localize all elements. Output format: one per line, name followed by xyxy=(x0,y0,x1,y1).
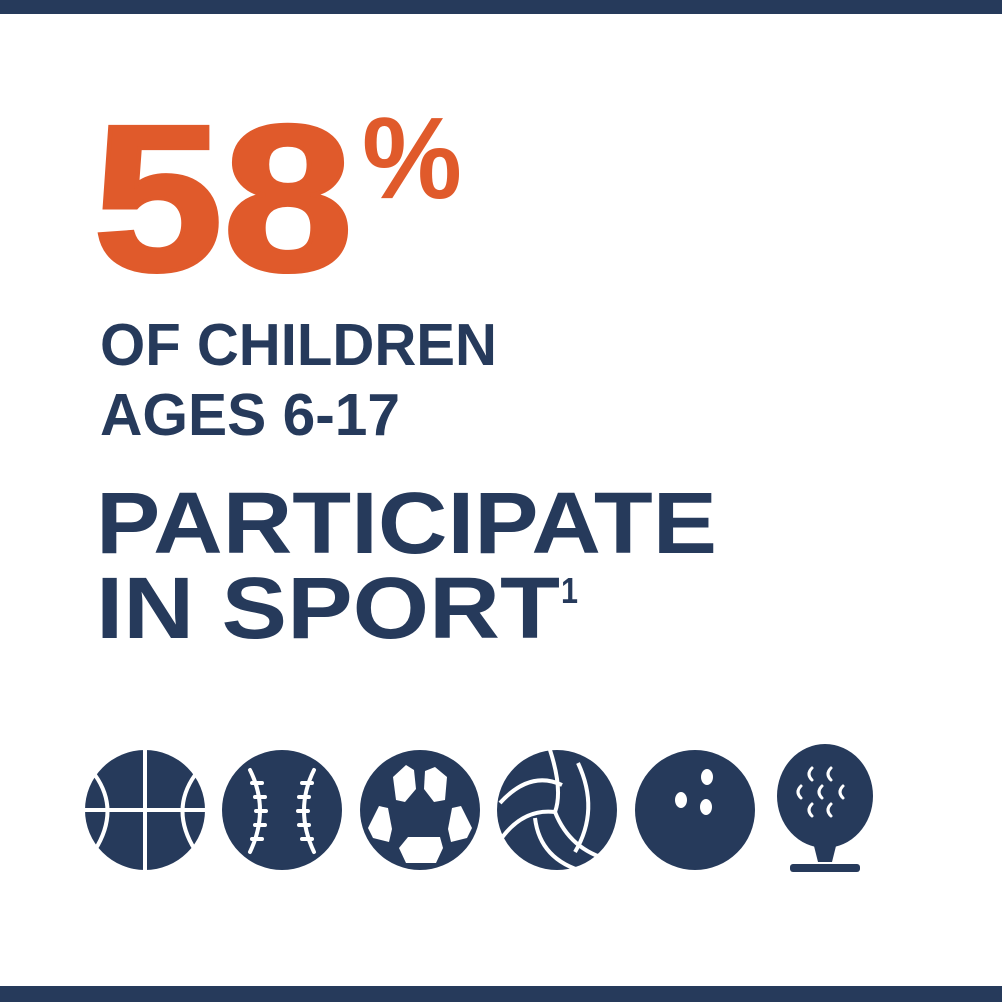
subtitle: of children ages 6-17 xyxy=(100,312,497,448)
icon: basketball xyxy=(85,750,205,870)
subtitle: of children ages 6-17: OF CHILDREN xyxy=(100,312,497,378)
heading: participate in sport: PARTICIPATE xyxy=(96,475,717,572)
heading: participate in sport: IN SPORT xyxy=(96,560,560,657)
icon: baseball xyxy=(222,750,342,870)
top border bar xyxy=(0,0,1002,14)
icon: soccer ball xyxy=(360,750,480,870)
icon: volleyball xyxy=(497,750,617,872)
icon: golf ball on tee xyxy=(777,744,873,872)
headline number 58%: % xyxy=(362,93,462,223)
subtitle: of children ages 6-17: AGES 6-17 xyxy=(100,382,400,448)
bottom border bar xyxy=(0,986,1002,1002)
headline number 58%: 58 xyxy=(93,83,353,315)
headline number 58% xyxy=(93,83,462,315)
icon: bowling ball xyxy=(635,750,755,870)
heading: participate in sport: 1 xyxy=(561,570,578,611)
heading: participate in sport xyxy=(96,475,717,657)
